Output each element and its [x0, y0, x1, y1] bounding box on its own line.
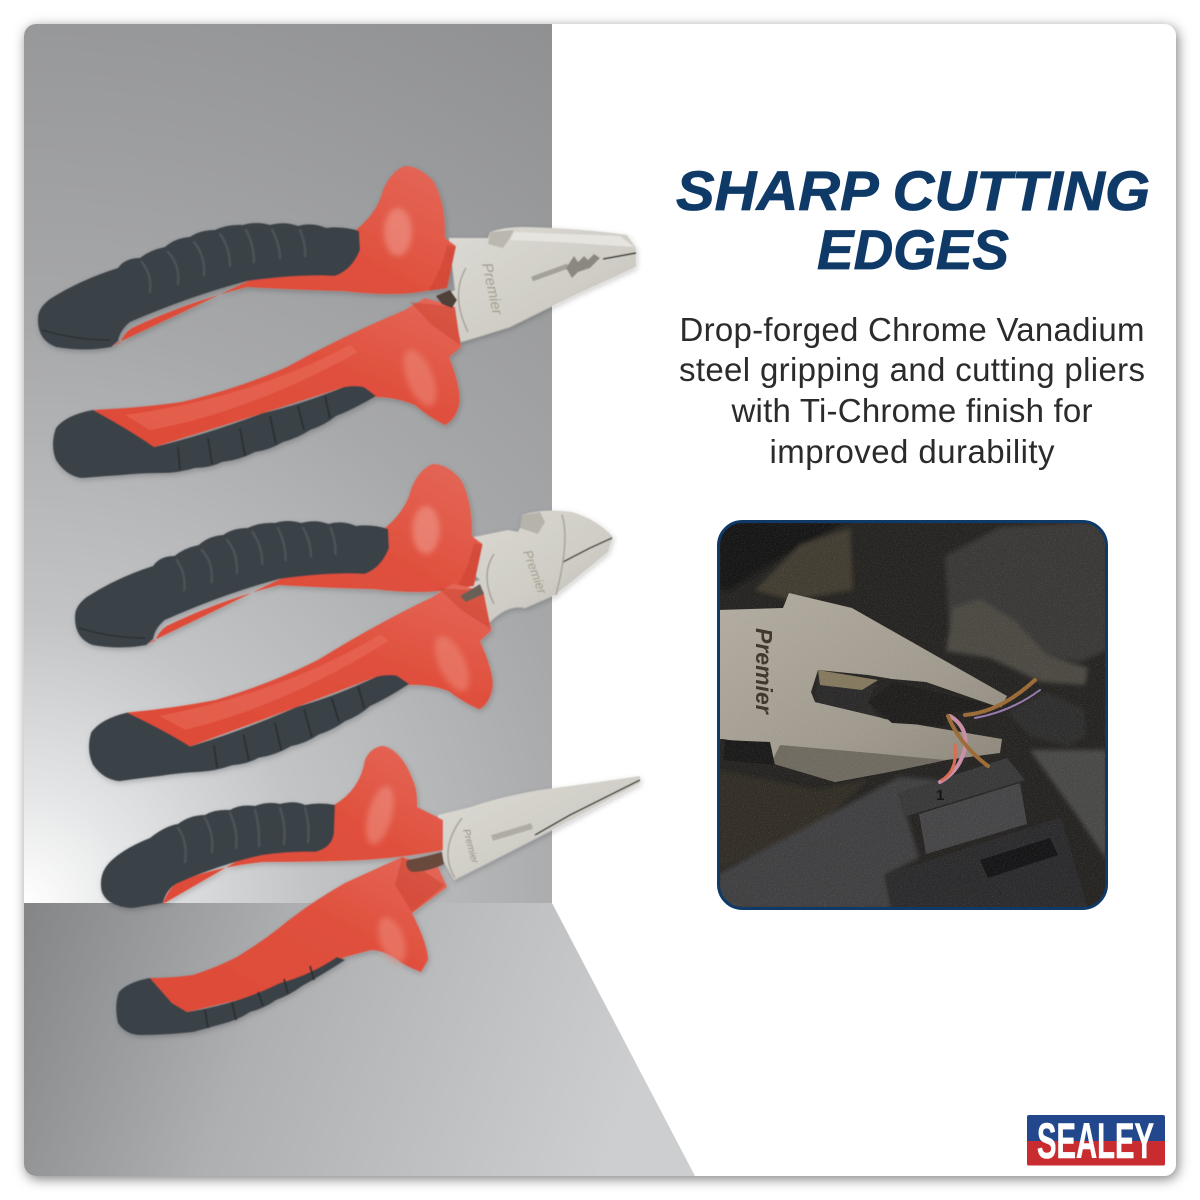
lower handle — [116, 857, 447, 1035]
title — [676, 159, 1150, 281]
title: EDGES — [817, 218, 1009, 281]
body text — [679, 311, 1145, 470]
pliers in photo — [718, 593, 1007, 782]
body text: with Ti-Chrome finish for — [730, 392, 1092, 429]
engraved logo: Premier — [751, 628, 777, 715]
icon: side cutters — [75, 464, 613, 783]
engraved brand: Premier — [520, 548, 550, 596]
photo frame — [718, 522, 1106, 908]
title: SHARP CUTTING — [676, 159, 1150, 222]
upper handle — [101, 746, 443, 908]
panel: grey studio backdrop — [24, 24, 695, 1176]
body text: steel gripping and cutting pliers — [679, 351, 1145, 388]
body text: Drop-forged Chrome Vanadium — [680, 311, 1144, 348]
engraved brand: Premier — [478, 261, 506, 317]
icon: long-nose pliers — [101, 746, 640, 1035]
photo: pliers cutting wires — [718, 521, 1107, 909]
photo: pliers cutting wires: 1 — [936, 787, 944, 804]
body text: improved durability — [770, 433, 1055, 470]
engraved brand: Premier — [460, 828, 480, 865]
icon: combination pliers — [38, 166, 636, 478]
wires — [940, 680, 1040, 782]
